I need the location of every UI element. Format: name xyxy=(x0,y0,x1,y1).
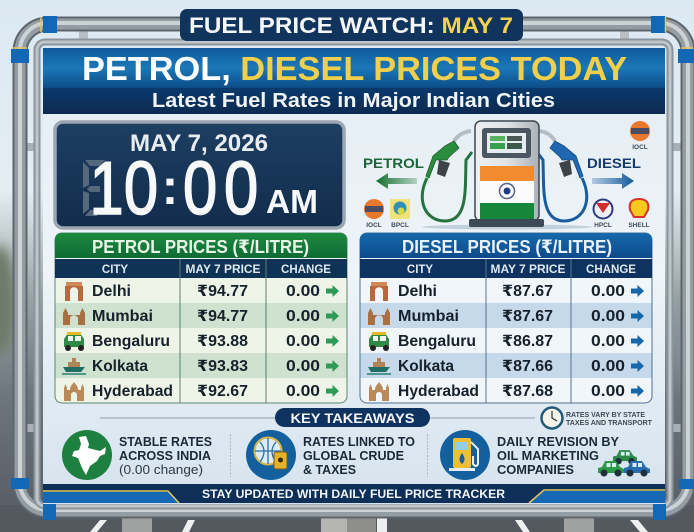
takeaway: global crude and taxes: & TAXES xyxy=(303,463,356,477)
row: bengaluru petrol: Bengaluru xyxy=(92,333,170,350)
row: hyderabad petrol: ₹92.67 xyxy=(197,383,248,400)
panel: petrol prices table xyxy=(55,233,347,403)
petrol table heading xyxy=(55,233,347,258)
row: bengaluru diesel: Bengaluru xyxy=(398,333,476,350)
header band xyxy=(43,48,665,114)
row: hyderabad diesel xyxy=(369,382,644,401)
row: delhi diesel: ₹87.67 xyxy=(502,283,553,300)
pump base xyxy=(469,219,544,227)
logo: iocl left xyxy=(364,199,384,229)
row: mumbai petrol: ₹94.77 xyxy=(197,308,248,325)
icon: cars xyxy=(598,450,650,476)
row: bengaluru diesel: 0.00 xyxy=(591,333,625,350)
logo: bpcl xyxy=(390,199,410,229)
row: mumbai diesel: Mumbai xyxy=(398,308,459,325)
logo: bpcl: BPCL xyxy=(391,222,409,229)
key takeaways heading xyxy=(275,408,430,427)
petrol column headers: CHANGE xyxy=(281,264,331,276)
row: kolkata diesel: ₹87.66 xyxy=(502,358,553,375)
row: mumbai petrol: Mumbai xyxy=(92,308,153,325)
row: delhi diesel xyxy=(370,282,644,301)
row: delhi petrol: Delhi xyxy=(92,283,131,300)
icon: fuel station xyxy=(440,430,490,480)
takeaway: daily revision: DAILY REVISION BY xyxy=(497,435,620,449)
takeaway: daily revision xyxy=(440,430,650,480)
time colon: : xyxy=(162,159,178,215)
row: mumbai petrol xyxy=(63,308,339,325)
row: hyderabad diesel: ₹87.68 xyxy=(502,383,553,400)
support posts xyxy=(122,516,594,532)
row: hyderabad petrol: Hyderabad xyxy=(92,383,173,400)
blue hose and nozzle xyxy=(537,131,587,221)
row: hyderabad petrol: 0.00 xyxy=(286,383,320,400)
row: hyderabad diesel: Hyderabad xyxy=(398,383,479,400)
diesel column headers xyxy=(360,259,652,278)
pump flag xyxy=(480,166,534,220)
row: bengaluru diesel xyxy=(369,332,644,351)
diesel table heading xyxy=(360,233,652,258)
row: delhi petrol: 0.00 xyxy=(286,283,320,300)
row: hyderabad petrol xyxy=(64,382,339,401)
green hose and nozzle xyxy=(422,131,472,221)
title: PETROL, DIESEL PRICES TODAY xyxy=(82,51,627,88)
icon: clock xyxy=(542,408,562,428)
logo: iocl top: IOCL xyxy=(632,144,648,151)
takeaway: global crude and taxes: GLOBAL CRUDE xyxy=(303,449,404,463)
brand logos xyxy=(364,121,650,229)
petrol table heading: PETROL PRICES (₹/LITRE) xyxy=(92,236,309,257)
petrol column headers: CITY xyxy=(102,264,128,276)
row: kolkata petrol xyxy=(62,358,339,375)
icon: globe and oil barrel xyxy=(246,430,296,480)
pump screen xyxy=(482,128,531,158)
row: mumbai diesel xyxy=(368,308,644,325)
note: rates vary by state: RATES VARY BY STATE xyxy=(566,410,645,419)
diesel label and arrow xyxy=(587,155,641,189)
icon: india map xyxy=(62,430,112,480)
takeaway: stable rates: STABLE RATES xyxy=(119,435,212,449)
row: delhi diesel: Delhi xyxy=(398,283,437,300)
row: bengaluru petrol: 0.00 xyxy=(286,333,320,350)
petrol label and arrow xyxy=(363,155,424,189)
diesel row stripes xyxy=(360,303,652,378)
unlit display segments xyxy=(83,160,105,216)
logo: shell: SHELL xyxy=(628,222,650,229)
diesel label and arrow: DIESEL xyxy=(587,155,641,171)
sign board xyxy=(43,48,665,504)
row: bengaluru petrol xyxy=(64,332,339,351)
row: hyderabad diesel: 0.00 xyxy=(591,383,625,400)
takeaway: global crude and taxes: RATES LINKED TO xyxy=(303,435,415,449)
row: kolkata petrol: ₹93.83 xyxy=(197,358,248,375)
takeaway: stable rates: (0.00 change) xyxy=(119,463,203,477)
footer band: STAY UPDATED WITH DAILY FUEL PRICE TRACKER xyxy=(202,489,506,501)
petrol column headers: MAY 7 PRICE xyxy=(186,264,261,276)
panel: diesel prices table xyxy=(360,233,652,403)
takeaway: daily revision: OIL MARKETING xyxy=(497,449,599,463)
logo: iocl top xyxy=(630,121,650,151)
time: 1000 xyxy=(89,146,258,230)
row: kolkata diesel: Kolkata xyxy=(398,358,454,375)
takeaway: stable rates xyxy=(62,430,212,480)
takeaway: global crude and taxes xyxy=(246,430,415,480)
takeaway: stable rates: ACROSS INDIA xyxy=(119,449,211,463)
petrol column headers xyxy=(55,259,347,278)
note: rates vary by state: TAXES AND TRANSPORT xyxy=(566,418,652,427)
logo: iocl left: IOCL xyxy=(366,222,382,229)
panel: date and time display xyxy=(55,122,344,230)
row: bengaluru diesel: ₹86.87 xyxy=(502,333,553,350)
key takeaways heading: KEY TAKEAWAYS xyxy=(290,410,414,426)
row: delhi diesel: 0.00 xyxy=(591,283,625,300)
row: bengaluru petrol: ₹93.88 xyxy=(197,333,248,350)
footer band xyxy=(43,484,665,503)
row: kolkata diesel: 0.00 xyxy=(591,358,625,375)
row: mumbai diesel: 0.00 xyxy=(591,308,625,325)
diesel column headers: CHANGE xyxy=(586,264,636,276)
date: MAY 7, 2026 xyxy=(130,130,268,157)
petrol label and arrow: PETROL xyxy=(363,155,424,171)
note: rates vary by state xyxy=(542,408,652,428)
takeaway: daily revision: COMPANIES xyxy=(497,463,574,477)
subtitle: Latest Fuel Rates in Major Indian Cities xyxy=(152,90,555,112)
am label: AM xyxy=(266,183,318,220)
row: mumbai petrol: 0.00 xyxy=(286,308,320,325)
diesel column headers: CITY xyxy=(407,264,433,276)
row: delhi petrol xyxy=(65,282,339,301)
illustration: fuel pump xyxy=(422,121,592,230)
diesel column headers: MAY 7 PRICE xyxy=(490,264,566,276)
top banner: FUEL PRICE WATCH: MAY 7 xyxy=(189,13,513,38)
row: kolkata petrol: 0.00 xyxy=(286,358,320,375)
logo: hpcl xyxy=(594,200,612,229)
logo: shell xyxy=(628,199,650,229)
pump body xyxy=(475,121,539,221)
logo: hpcl: HPCL xyxy=(594,222,612,229)
petrol row stripes xyxy=(56,303,346,378)
row: kolkata petrol: Kolkata xyxy=(92,358,148,375)
row: kolkata diesel xyxy=(367,358,644,375)
row: delhi petrol: ₹94.77 xyxy=(197,283,248,300)
diesel table heading: DIESEL PRICES (₹/LITRE) xyxy=(402,236,612,257)
row: mumbai diesel: ₹87.67 xyxy=(502,308,553,325)
